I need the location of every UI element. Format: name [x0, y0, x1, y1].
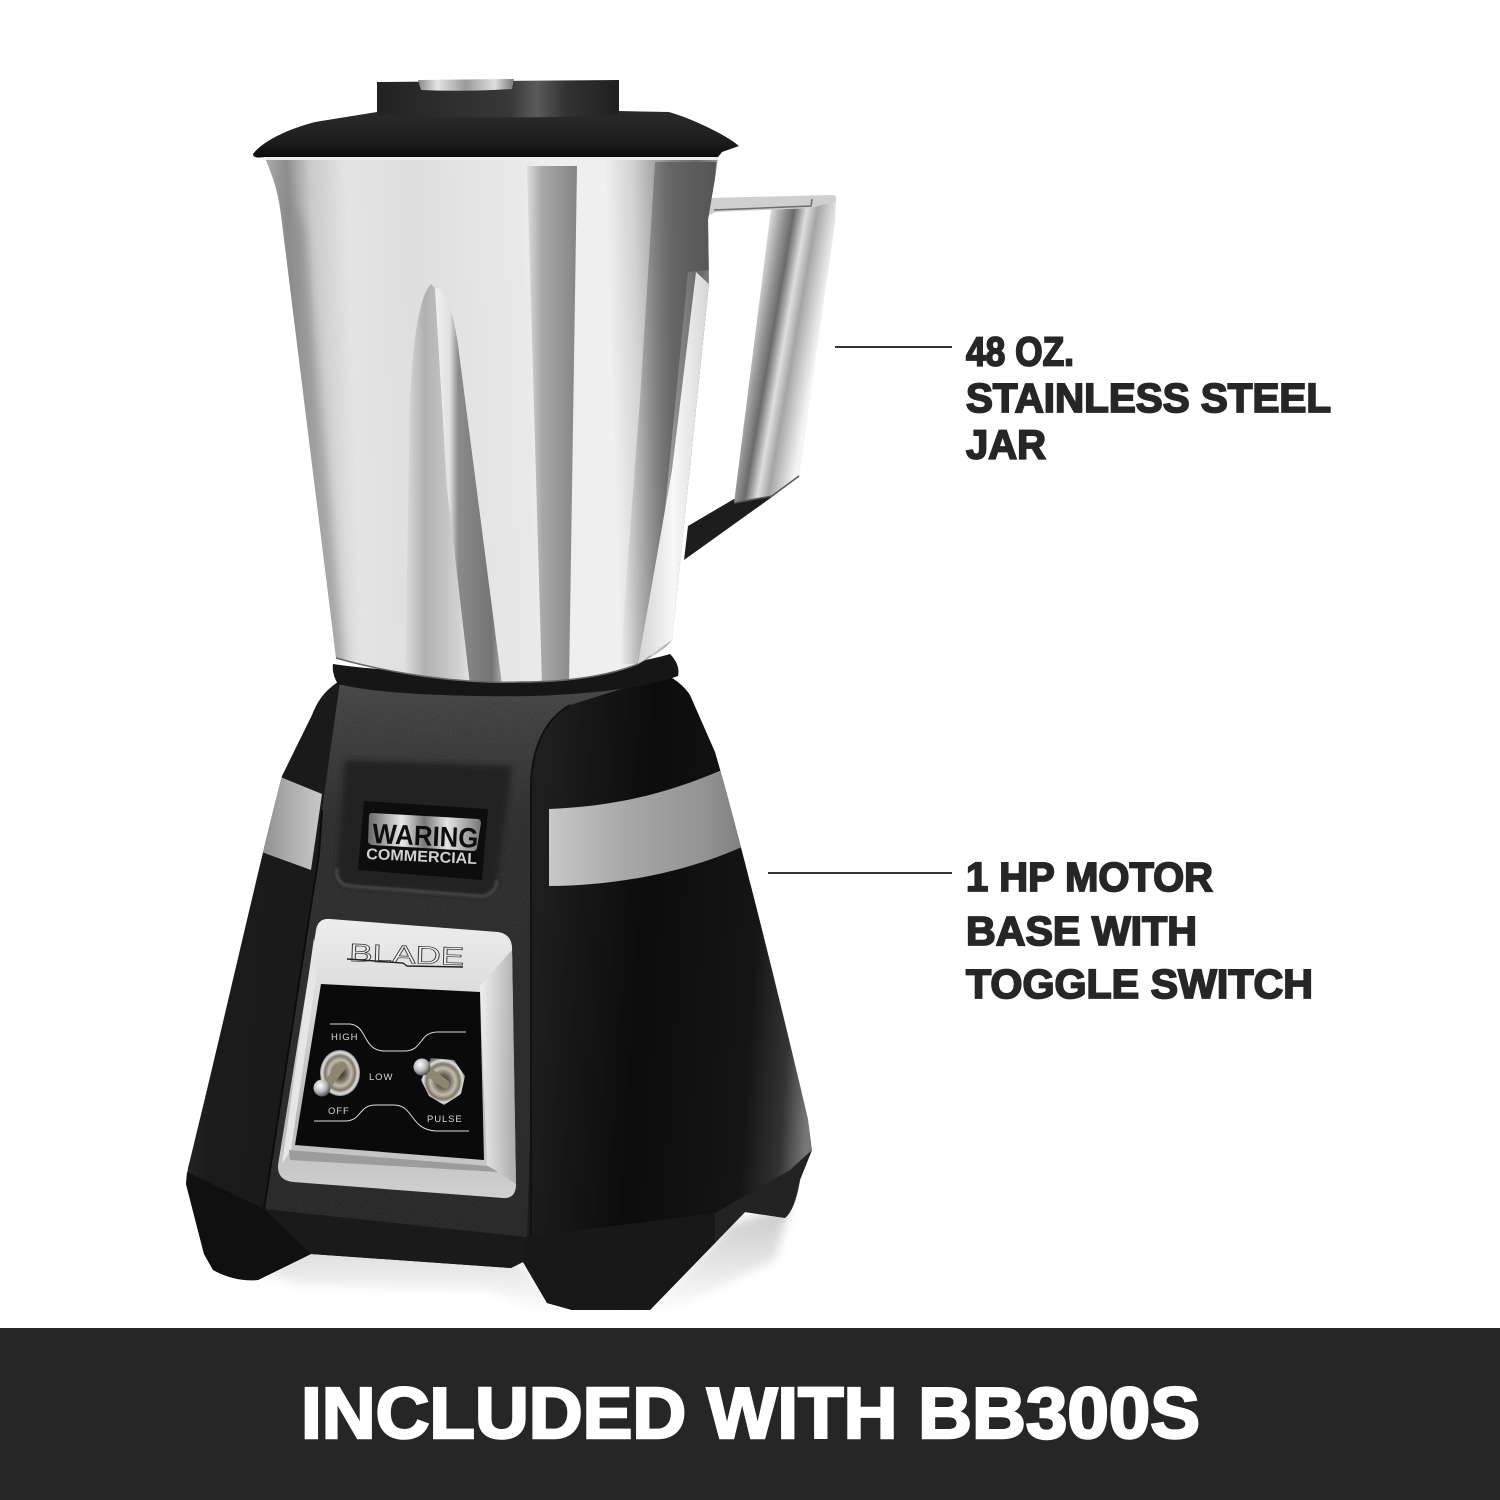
logo recess	[337, 760, 512, 896]
right skirt	[523, 1213, 715, 1310]
plate bevel right	[480, 950, 516, 1184]
jar left shade	[283, 210, 349, 660]
left toggle switch	[314, 1050, 360, 1096]
bottom banner	[0, 1328, 1500, 1500]
leader line: motor base	[768, 872, 952, 874]
Waring Commercial badge: WARING	[372, 818, 479, 854]
callout text: motor base: TOGGLE SWITCH	[966, 961, 1313, 1007]
LOW label: LOW	[369, 1072, 393, 1083]
black switch panel	[295, 984, 484, 1160]
steel bands on base	[256, 770, 760, 886]
rear right skirt	[715, 1150, 812, 1243]
front panel	[264, 680, 650, 1237]
motor base	[186, 654, 812, 1310]
front skirt	[264, 1209, 527, 1268]
Waring Commercial badge: COMMERCIAL	[366, 846, 477, 868]
callout text: motor base: 1 HP MOTOR	[966, 854, 1213, 900]
blender product illustration	[186, 79, 836, 1315]
leader line: jar	[835, 346, 952, 348]
left skirt	[186, 1172, 311, 1280]
jar rib right lobe	[435, 288, 502, 685]
callout text: jar	[966, 328, 1331, 468]
floor shadow	[225, 1205, 790, 1315]
jar centre dark band	[527, 166, 577, 685]
stainless steel jar	[265, 156, 720, 685]
callout text: jar: JAR	[966, 422, 1046, 468]
OFF label: OFF	[328, 1106, 350, 1117]
banner title: INCLUDED WITH BB300S	[301, 1374, 1200, 1454]
base body	[186, 672, 812, 1310]
jar handle	[684, 195, 836, 560]
PULSE label: PULSE	[427, 1114, 463, 1125]
panel lines	[330, 1024, 466, 1051]
jar right shade	[620, 162, 716, 664]
jar lid	[253, 79, 739, 158]
Waring Commercial badge	[358, 801, 488, 880]
right steel band	[549, 770, 760, 886]
HIGH label: HIGH	[331, 1032, 358, 1043]
callout: jar	[835, 328, 1331, 468]
callout text: motor base: BASE WITH	[966, 908, 1197, 954]
callout: motor base	[768, 854, 1313, 1007]
jar rib left lobe	[407, 284, 464, 680]
plate bevel left	[282, 938, 316, 1164]
BLADE wordmark: BLADE	[349, 939, 465, 971]
callout text: jar: 48 OZ.	[966, 328, 1074, 374]
right toggle switch	[414, 1058, 465, 1105]
plate bevel bottom	[289, 1150, 498, 1172]
callout text: jar: STAINLESS STEEL	[966, 375, 1331, 421]
BLADE wordmark	[347, 939, 465, 971]
callout text: motor base	[966, 854, 1313, 1007]
control plate	[278, 919, 516, 1198]
jar rim line	[265, 157, 718, 160]
left steel band	[263, 778, 322, 870]
collar	[333, 654, 679, 696]
jar right bright panel	[638, 272, 709, 664]
